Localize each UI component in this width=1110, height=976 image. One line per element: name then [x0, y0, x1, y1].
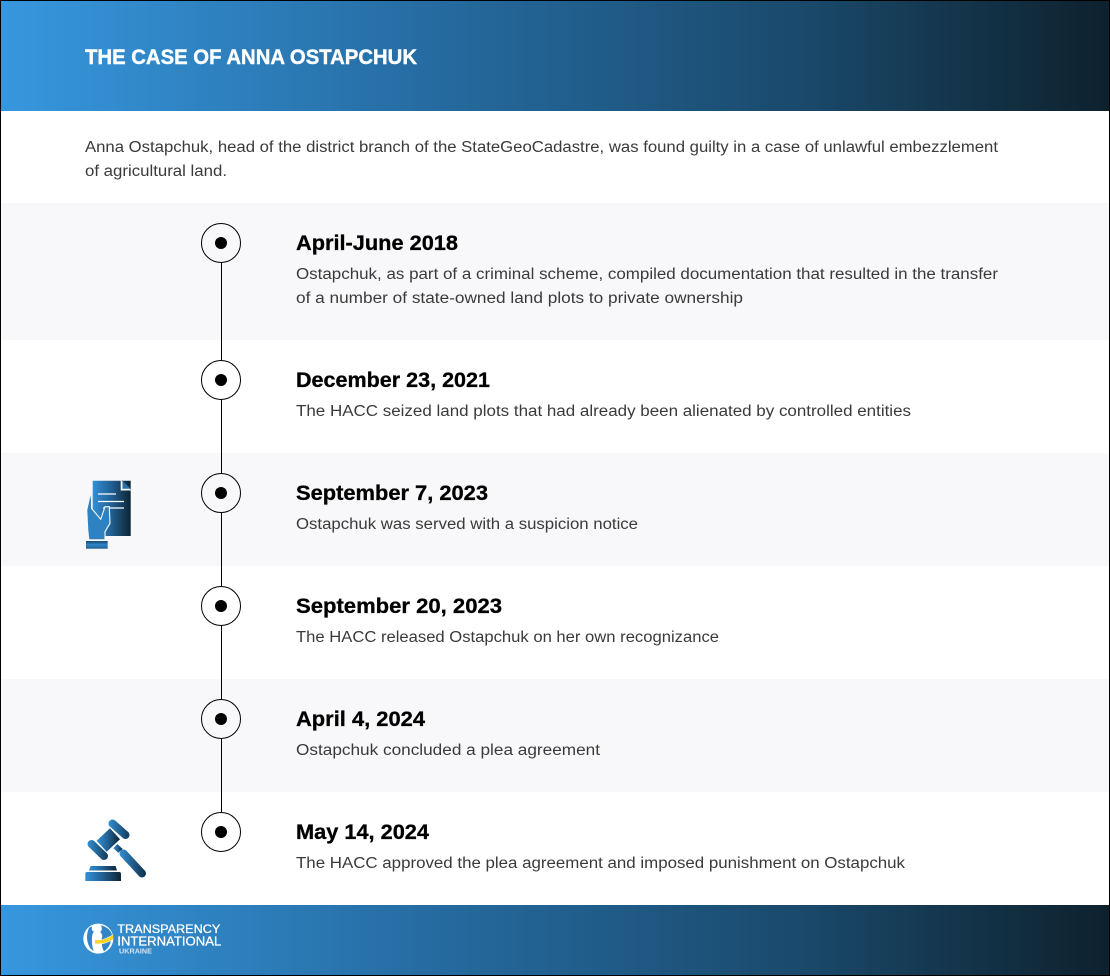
- event: September 7, 2023: Ostapchuk was served with a suspicion notice: [296, 516, 638, 533]
- row background: April 4, 2024: [1, 679, 1109, 792]
- logo: Transparency International Ukraine: INTERNATIONAL: [117, 934, 221, 948]
- row background: September 7, 2023: [1, 453, 1109, 566]
- icon: hand holding document: [86, 480, 132, 549]
- header banner: [1, 1, 1109, 111]
- intro paragraph: [85, 139, 999, 180]
- logo: Transparency International Ukraine: TRANSPARENCY: [117, 922, 220, 936]
- timeline line: [221, 243, 222, 832]
- logo: Transparency International Ukraine: UKRAINE: [119, 948, 152, 956]
- icon: judge gavel: [85, 824, 142, 881]
- timeline markers: [202, 224, 240, 852]
- event: May 14, 2024: [296, 821, 905, 872]
- event: September 20, 2023: September 20, 2023: [296, 595, 502, 618]
- title: THE CASE OF ANNA OSTAPCHUK: [85, 46, 417, 69]
- event: September 20, 2023: [296, 595, 719, 646]
- event: April 4, 2024: Ostapchuk concluded a plea agreement: [296, 742, 601, 759]
- event: May 14, 2024: The HACC approved the plea agreement and imposed punishment on Ostapchuk: [296, 855, 905, 872]
- intro paragraph: Anna Ostapchuk, head of the district branch of the StateGeoCadastre, was found guilty in a case of unlawful embezzlement: [85, 139, 999, 156]
- event: April 4, 2024: April 4, 2024: [296, 708, 425, 731]
- event: September 7, 2023: September 7, 2023: [296, 482, 488, 505]
- event: December 23, 2021: December 23, 2021: [296, 369, 490, 392]
- event: December 23, 2021: The HACC seized land plots that had already been alienated by controlled entities: [296, 403, 911, 420]
- event: April-June 2018: Ostapchuk, as part of a criminal scheme, compiled documentation that resulted in the transfer: [296, 266, 998, 283]
- event: April 4, 2024: [296, 708, 601, 759]
- event: December 23, 2021: [296, 369, 911, 420]
- row background: April-June 2018: [1, 203, 1109, 340]
- event: September 7, 2023: [296, 482, 638, 533]
- footer banner: [1, 905, 1109, 975]
- event: April-June 2018: April-June 2018: [296, 232, 458, 255]
- event: May 14, 2024: May 14, 2024: [296, 821, 429, 844]
- logo: Transparency International Ukraine: [83, 922, 221, 956]
- event: April-June 2018: [296, 232, 998, 307]
- event: April-June 2018: of a number of state-owned land plots to private ownership: [296, 290, 743, 307]
- intro paragraph: of agricultural land.: [85, 163, 227, 180]
- event: September 20, 2023: The HACC released Ostapchuk on her own recognizance: [296, 629, 719, 646]
